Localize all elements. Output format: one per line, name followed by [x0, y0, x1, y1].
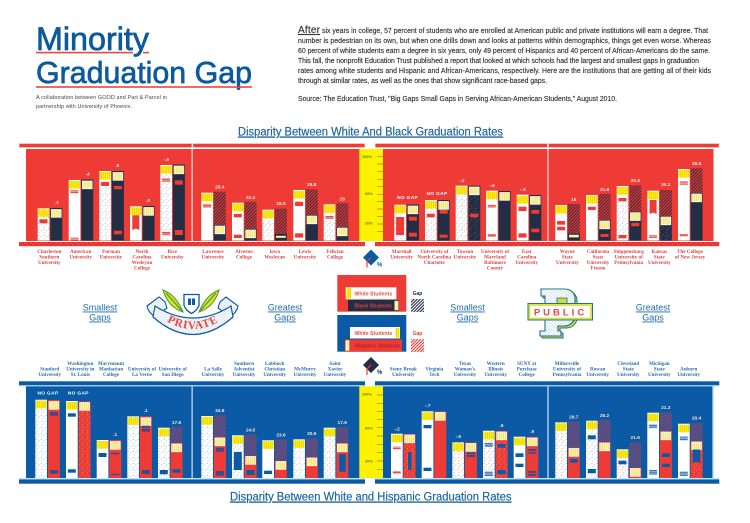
- percent scale: bottom: 60%: [365, 426, 373, 430]
- intro text block: six years in college, 57 percent of students who are enrolled at American public and private institutions will earn a degree. That: [322, 28, 708, 35]
- legend: hispanic students: White Students: [354, 331, 392, 337]
- top school labels: right half: California: [587, 249, 609, 255]
- top school labels: right half: Charlotte: [424, 260, 446, 266]
- top school labels: left half: Felician: [326, 249, 344, 255]
- top school labels: right half: The College: [677, 249, 703, 255]
- bottom school labels: left half: University: [233, 372, 256, 378]
- section labels: private greatest gaps: Gaps: [274, 312, 296, 322]
- icon: graduation cap dark: [363, 357, 383, 376]
- bars: Saint Xavier University: [324, 420, 348, 478]
- bars: Alverno College: 32.2: [246, 195, 255, 201]
- bars: Rowan University: 25.2: [600, 413, 609, 419]
- bars: California State University Fresno: 31.8: [600, 187, 609, 193]
- bars: University of Maryland Baltimore County: [486, 183, 511, 240]
- bottom school labels: right half: Western: [487, 361, 505, 367]
- top school labels: right half: East: [522, 249, 532, 255]
- bars: Texas Woman's University: -.5: [455, 434, 461, 440]
- bars: Shippensburg University of Pennsylvania: 30.3: [631, 178, 640, 184]
- legend: hispanic students: [337, 315, 406, 352]
- bottom school labels: right half: University: [392, 372, 415, 378]
- bars: Marshall University: [394, 195, 419, 240]
- bars: Cleveland State University: 21.6: [631, 435, 640, 441]
- top school labels: right half: Carolina: [517, 255, 537, 261]
- top school labels: right half: University: [556, 260, 579, 266]
- bars: Michigan State University: [647, 405, 672, 478]
- top school labels: right half: University: [454, 255, 477, 261]
- emblem: private: PRIVATE: [167, 315, 218, 330]
- bars: Shippensburg University of Pennsylvania: [617, 178, 641, 240]
- bars: American University: .4: [86, 172, 90, 178]
- intro text block: rates among white students and Hispanic and African-Americans, respectively. Here are the institutions that are getting all of their kids: [298, 68, 712, 75]
- legend: hispanic students: Hispanic Students: [355, 344, 400, 350]
- top school labels: right half: [390, 249, 706, 272]
- bottom school labels: right half: Millersville: [555, 361, 579, 367]
- bars: Marymount Manhattan College: [97, 432, 121, 478]
- top school labels: right half: University: [648, 260, 671, 266]
- section labels: public greatest gaps: Gaps: [642, 312, 664, 322]
- title: [36, 21, 252, 90]
- bottom school labels: right half: SUNY at: [517, 361, 536, 367]
- legend: black students: Black Students: [354, 304, 392, 310]
- bottom school labels: left half: University in: [66, 366, 95, 372]
- top school labels: left half: University: [38, 260, 61, 266]
- bars: Alverno College: [232, 195, 257, 240]
- legend: black students: [337, 275, 406, 312]
- top school labels: right half: Baltimore: [484, 260, 507, 266]
- percent scale: top: [359, 149, 383, 241]
- top school labels: right half: Marshall: [392, 249, 412, 255]
- bars: Furman University: .6: [115, 163, 120, 169]
- emblem: private: [146, 289, 239, 336]
- bottom school labels: left half: University of: [128, 366, 156, 372]
- bars: University of La Verne: [127, 408, 152, 478]
- top school labels: left half: Iowa: [269, 249, 280, 255]
- section labels: public greatest gaps: Greatest: [636, 302, 670, 312]
- section labels: private greatest gaps: Greatest: [268, 302, 302, 312]
- bars: Lubbock Christian University: [262, 432, 287, 478]
- bars: Millersville University of Pennsylvania: [555, 414, 580, 478]
- top school labels: right half: Kansas: [651, 249, 667, 255]
- bottom chart frame: blue panels and stripes: [19, 381, 719, 484]
- bars: Lewis University: [293, 182, 318, 240]
- bars: La Salle University: 34.6: [215, 408, 225, 414]
- percent scale: top: 60%: [365, 192, 373, 196]
- bottom school labels: left half: San Diego: [162, 372, 184, 378]
- subtitle: collaboration credit: [36, 95, 167, 110]
- top school labels: right half: Shippensburg: [614, 249, 644, 255]
- title: Minority: [36, 21, 149, 57]
- top school labels: right half: State: [654, 255, 666, 261]
- bottom school labels: right half: College: [519, 372, 536, 378]
- top school labels: left half: University: [161, 255, 184, 261]
- bottom school labels: right half: Cleveland: [617, 361, 639, 367]
- bars: Rowan University: [586, 413, 611, 478]
- top school labels: left half: Southern: [39, 255, 60, 261]
- bottom school labels: right half: Stony Brook: [390, 366, 417, 372]
- legend: gap hispanic: [411, 331, 424, 352]
- top school labels: right half: University of: [615, 255, 643, 261]
- bottom school labels: right half: Virginia: [425, 366, 443, 372]
- subtitle: collaboration credit: partnership with University of Phoenix.: [36, 104, 132, 110]
- bars: Charleston Southern University: .3: [55, 200, 59, 206]
- heading: white and black disparity: Disparity Between White And Black Graduation Rates: [238, 126, 503, 138]
- bottom school labels: left half: Southern: [234, 361, 254, 367]
- bottom school labels: right half: Tech: [429, 372, 440, 378]
- heading: white and hispanic disparity: Disparity Between White and Hispanic Graduation Rates: [230, 492, 512, 504]
- emblem: public: PUBLIC: [534, 308, 587, 318]
- bars: Felician College: [324, 196, 348, 240]
- bars: Kansas State University: 30.2: [661, 182, 671, 188]
- bars: SUNY at Purchase College: [514, 429, 538, 478]
- top school labels: left half: Lewis: [299, 249, 311, 255]
- bars: Western Illinois University: .6: [499, 423, 504, 429]
- percent scale: bottom: [359, 386, 383, 478]
- bars: North Carolina Wesleyan College: .6: [146, 198, 150, 204]
- section labels: public smallest gaps: Gaps: [457, 312, 479, 322]
- bars: Millersville University of Pennsylvania: 29.7: [569, 414, 579, 420]
- bars: Washington University in St. Louis: NO GAP: [68, 390, 89, 396]
- bottom school labels: right half: University: [454, 372, 477, 378]
- intro text block: This fall, the nonprofit Education Trust published a report that looked at which schools had the largest and smallest gaps in graduation: [298, 58, 699, 65]
- bottom school labels: left half: [38, 361, 347, 378]
- intro text block: number is pedestrian on its own, but when one drills down and looks at patterns within demographics, things get even worse. Whereas: [298, 38, 712, 45]
- bottom school labels: right half: University: [648, 372, 671, 378]
- bars: Washington University in St. Louis: [66, 390, 91, 478]
- top school labels: right half: University: [390, 255, 413, 261]
- top school labels: left half: Lawrence: [202, 249, 224, 255]
- bars: Towson University: [456, 178, 480, 240]
- top school labels: right half: Fresno: [591, 266, 606, 272]
- bars: Stony Brook University: [391, 426, 416, 478]
- bottom school labels: left half: University: [294, 372, 317, 378]
- bars: University of San Diego: [158, 420, 183, 478]
- bottom school labels: left half: McMurry: [294, 366, 316, 372]
- bars: Lawrence University: [201, 184, 226, 240]
- top school labels: left half: Furman: [102, 249, 120, 255]
- top school labels: left half: Carolina: [132, 255, 152, 261]
- bars: Wayne State University: 16: [571, 197, 577, 203]
- bars: Western Illinois University: [483, 423, 508, 478]
- top school labels: left half: University: [69, 255, 92, 261]
- subtitle: collaboration credit: A collaboration between GOOD and Part & Parcel in: [36, 95, 167, 101]
- legend: black students: White Students: [354, 291, 392, 297]
- bars: University of La Verne: .1: [144, 408, 148, 414]
- bars: Saint Xavier University: 17.6: [338, 420, 347, 426]
- bars: East Carolina University: [517, 187, 541, 240]
- bars: Towson University: -.2: [459, 178, 465, 184]
- bars: Furman University: [99, 163, 124, 240]
- top school labels: right half: University of: [481, 249, 509, 255]
- bars: University of North Carolina Charlotte: NO GAP: [426, 191, 448, 197]
- bottom school labels: left half: Stanford: [40, 366, 59, 372]
- bars: McMurry University: [293, 431, 318, 478]
- bars: McMurry University: 20.5: [307, 431, 317, 437]
- top school labels: right half: State: [562, 255, 574, 261]
- bars: Lubbock Christian University: 23.6: [276, 432, 286, 438]
- top school labels: right half: Wayne: [560, 249, 575, 255]
- bottom school labels: right half: [390, 361, 700, 378]
- bottom school labels: right half: State: [623, 366, 635, 372]
- bottom school labels: left half: University: [324, 372, 347, 378]
- bottom school labels: right half: Purchase: [517, 366, 537, 372]
- bottom school labels: right half: University: [484, 372, 507, 378]
- intro text block: Source: The Education Trust, "Big Gaps Small Gaps in Serving African-American Students," August 2010.: [298, 96, 617, 103]
- bars: Rice University: [160, 157, 185, 240]
- top school labels: left half: North: [135, 249, 149, 255]
- bars: Auburn University: [678, 416, 703, 478]
- bottom school labels: right half: Pennsylvania: [553, 372, 582, 378]
- top school labels: left half: Wesleyan: [264, 255, 285, 261]
- bottom school labels: right half: Michigan: [649, 361, 670, 367]
- bottom school labels: right half: Illinois: [488, 366, 503, 372]
- bars: Rice University: -.6: [163, 157, 169, 163]
- top school labels: left half: Rice: [167, 249, 177, 255]
- bars: Stanford University: NO GAP: [37, 390, 59, 396]
- top school labels: left half: Charleston: [37, 249, 61, 255]
- section labels: private smallest gaps: Smallest: [83, 302, 117, 312]
- bottom school labels: left half: University: [202, 372, 225, 378]
- bottom school labels: left half: Adventist: [234, 366, 255, 372]
- bars: Kansas State University: [647, 182, 672, 240]
- bars: Texas Woman's University: [452, 434, 477, 478]
- bottom school labels: left half: College: [103, 372, 120, 378]
- bars: California State University Fresno: [586, 187, 611, 240]
- bars: The College of New Jersey: 28.8: [692, 161, 701, 167]
- bottom school labels: left half: University: [38, 372, 61, 378]
- bars: Lewis University: 29.8: [307, 182, 317, 188]
- bars: Iowa Wesleyan: 18.9: [276, 201, 286, 207]
- bottom school labels: left half: Washington: [67, 361, 93, 367]
- top school labels: right half: Pennsylvania: [614, 260, 644, 266]
- bars: Southern Adventist University: 24.5: [246, 428, 255, 434]
- intro text block: through at similar rates, as well as the ones that show significant race-based gaps.: [298, 78, 547, 85]
- bars: SUNY at Purchase College: .9: [530, 429, 535, 435]
- top school labels: left half: University: [100, 255, 123, 261]
- bottom school labels: right half: University: [617, 372, 640, 378]
- title: Graduation Gap: [36, 55, 252, 90]
- bottom school labels: right half: Woman's: [455, 366, 475, 372]
- bars: Virginia Tech: [422, 403, 446, 478]
- bars: Michigan State University: 21.3: [661, 405, 671, 411]
- bars: La Salle University: [201, 408, 226, 478]
- bottom school labels: right half: University: [586, 372, 609, 378]
- bars: East Carolina University: -.3: [520, 187, 526, 193]
- bottom school labels: right half: University of: [553, 366, 581, 372]
- bars: The College of New Jersey: [678, 161, 703, 240]
- bars: Marymount Manhattan College: .1: [113, 432, 118, 438]
- legend: gap black: Gap: [413, 291, 422, 297]
- icon: graduation cap blue: %: [377, 262, 383, 268]
- bars: North Carolina Wesleyan College: [130, 198, 155, 240]
- top chart frame: red panels and stripes: [19, 144, 719, 246]
- percent scale: bottom: 20%: [365, 460, 373, 464]
- bars: American University: [69, 172, 93, 240]
- bottom school labels: right half: University: [677, 372, 700, 378]
- bars: Southern Adventist University: [232, 428, 257, 478]
- percent scale: top: 100%: [362, 155, 372, 159]
- emblem: public: [528, 289, 592, 338]
- legend: gap hispanic: Gap: [413, 331, 422, 337]
- bars: Charleston Southern University: [38, 200, 62, 240]
- bars: Cleveland State University: [617, 435, 641, 478]
- bottom school labels: left half: University of: [159, 366, 187, 372]
- top school labels: left half: [37, 249, 344, 272]
- percent scale: top: 20%: [365, 222, 373, 226]
- bottom school labels: left half: La Verne: [132, 372, 153, 378]
- top school labels: right half: State: [592, 255, 604, 261]
- intro text block: After: [298, 25, 321, 36]
- bottom school labels: right half: Auburn: [680, 366, 697, 372]
- bars: Auburn University: 20.4: [692, 416, 701, 422]
- bars: Lawrence University: 28.4: [215, 184, 225, 190]
- top school labels: left half: Wesleyan: [132, 260, 152, 266]
- top school labels: right half: Towson: [457, 249, 473, 255]
- icon: graduation cap dark: %: [377, 370, 383, 376]
- top school labels: left half: College: [236, 255, 253, 261]
- percent scale: bottom: 100%: [362, 392, 372, 396]
- section labels: private smallest gaps: Gaps: [89, 312, 111, 322]
- bottom school labels: left half: Marymount: [98, 361, 124, 367]
- bars: Stony Brook University: -.2: [394, 426, 400, 432]
- intro text block: [298, 25, 712, 103]
- top school labels: right half: Maryland: [484, 255, 506, 261]
- bottom school labels: left half: Saint: [329, 361, 341, 367]
- bars: Marshall University: NO GAP: [397, 195, 419, 201]
- bottom school labels: left half: Christian: [264, 366, 285, 372]
- bottom school labels: right half: Texas: [459, 361, 471, 367]
- bars: University of North Carolina Charlotte: [425, 191, 450, 240]
- bottom school labels: left half: Lubbock: [265, 361, 284, 367]
- section labels: public smallest gaps: Smallest: [450, 302, 485, 312]
- bars: Iowa Wesleyan: [262, 201, 287, 240]
- top school labels: left half: Alverno: [235, 249, 253, 255]
- top school labels: left half: American: [70, 249, 91, 255]
- bars: University of Maryland Baltimore County: -.6: [489, 183, 495, 189]
- bottom school labels: right half: State: [654, 366, 666, 372]
- top school labels: right half: University: [587, 260, 610, 266]
- bottom school labels: left half: Manhattan: [99, 366, 123, 372]
- top school labels: left half: University: [202, 255, 225, 261]
- top school labels: left half: College: [327, 255, 344, 261]
- bottom school labels: left half: La Salle: [204, 366, 222, 372]
- legend: gap black: [411, 291, 424, 312]
- top school labels: left half: University: [294, 255, 317, 261]
- top school labels: left half: College: [134, 266, 151, 272]
- bars: University of San Diego: 17.6: [172, 420, 181, 426]
- top school labels: right half: County: [487, 266, 504, 272]
- top school labels: right half: University of: [420, 249, 448, 255]
- top school labels: right half: North Carolina: [418, 255, 451, 261]
- bars: Virginia Tech: -.7: [425, 403, 431, 409]
- bottom school labels: left half: University: [263, 372, 286, 378]
- top school labels: right half: of New Jersey: [675, 255, 706, 261]
- bars: Stanford University: [35, 390, 60, 478]
- bars: Wayne State University: [555, 197, 580, 240]
- bottom school labels: left half: St. Louis: [71, 372, 90, 378]
- bottom school labels: left half: Xavier: [328, 366, 343, 372]
- bottom school labels: right half: Rowan: [590, 366, 605, 372]
- icon: graduation cap blue: [363, 250, 383, 268]
- intro text block: 60 percent of white students earn a degree in six years, only 49 percent of Hispanics and 40 percent of African-Americans do the same.: [298, 48, 710, 55]
- bars: Felician College: 28: [340, 196, 345, 202]
- top school labels: right half: University: [515, 260, 538, 266]
